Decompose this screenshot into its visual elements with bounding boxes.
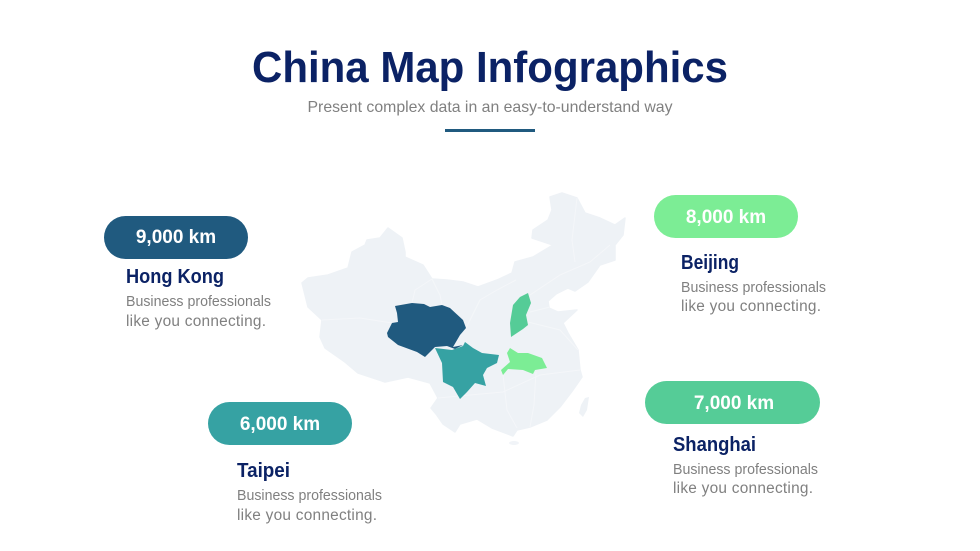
pill: 7,000 km: 7,000 km (694, 393, 774, 414)
callout: Beijing (654, 195, 826, 315)
label: Taipei: Taipei (237, 460, 290, 482)
description: Taipei (237, 488, 382, 524)
description: Shanghai: like you connecting. (673, 480, 813, 497)
callout: Taipei (208, 402, 382, 524)
title underline (445, 129, 535, 132)
label: Beijing: Beijing (681, 252, 739, 274)
title: China Map Infographics (252, 43, 728, 92)
map: Shanxi (510, 293, 531, 337)
map: mainland outline (302, 193, 625, 436)
map: Sichuan (435, 342, 499, 399)
description: Hong Kong: Business professionals (126, 294, 271, 310)
description: Shanghai (673, 462, 818, 497)
pill: 9,000 km: 9,000 km (136, 227, 216, 248)
description: Hong Kong (126, 294, 271, 330)
map: Taiwan (579, 397, 589, 417)
pill: 6,000 km: 6,000 km (240, 414, 320, 435)
map: Qinghai (387, 303, 466, 357)
label: Shanghai: Shanghai (673, 434, 756, 456)
pill: 8,000 km: 8,000 km (686, 207, 766, 228)
pill: 8,000 km (654, 195, 798, 238)
description: Shanghai: Business professionals (673, 462, 818, 478)
map: province borders (322, 198, 610, 428)
description: Taipei: Business professionals (237, 488, 382, 504)
callout: Hong Kong (104, 216, 271, 330)
map of China (302, 193, 625, 445)
label: Hong Kong: Hong Kong (126, 266, 224, 288)
description: Beijing: like you connecting. (681, 298, 821, 315)
pill: 9,000 km (104, 216, 248, 259)
map: Hainan (509, 441, 519, 445)
pill: 6,000 km (208, 402, 352, 445)
description: Taipei: like you connecting. (237, 507, 377, 524)
map: Hubei (501, 348, 547, 375)
description: Hong Kong: like you connecting. (126, 313, 266, 330)
callout: Shanghai (645, 381, 820, 497)
description: Beijing: Business professionals (681, 280, 826, 296)
pill: 7,000 km (645, 381, 820, 424)
description: Beijing (681, 280, 826, 315)
subtitle: Present complex data in an easy-to-understand way (308, 99, 672, 116)
